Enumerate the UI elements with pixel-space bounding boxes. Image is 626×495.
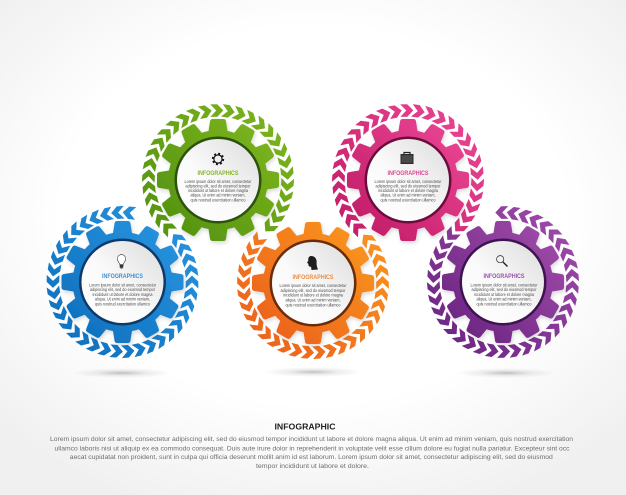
footer text block (50, 436, 573, 470)
purple body text: Lorem ipsum dolor sit amet, consectetur (470, 282, 538, 288)
orange body text: quis nostrud exercitation ullamco (286, 302, 341, 308)
footer text block: aecat cupidatat non proident, sunt in culpa qui officia deserunt mollit anim id est laborum. Lorem ipsum dolor sit amet, consectetur adipiscing elit, sed do eiusmod (70, 454, 553, 461)
pink body text: adipiscing elit, sed do eiusmod tempor (376, 184, 441, 189)
green dark ring (174, 136, 262, 224)
purple body text: aliqua. Ut enim ad minim veniam, (476, 296, 532, 302)
purple heading: INFOGRAPHICS (484, 273, 524, 280)
green body text: quis nostrud exercitation ullamco (190, 198, 246, 202)
pink body text: Lorem ipsum dolor sit amet, consectetur (374, 179, 442, 184)
panel: orange gear (237, 222, 389, 360)
title: INFOGRAPHIC (274, 422, 336, 432)
floor shadow: blue gear (72, 368, 172, 378)
icon: head silhouette (307, 256, 318, 270)
orange cog (251, 221, 375, 345)
pink body text: aliqua. Ut enim ad minim veniam, (380, 193, 436, 198)
purple body text: adipiscing elit, sed do eiusmod tempor (472, 287, 537, 292)
pink chevron ring (332, 104, 484, 238)
orange body text: Lorem ipsum dolor sit amet, consectetur (280, 283, 347, 288)
orange heading: INFOGRAPHICS (292, 274, 334, 281)
blue body text: incididunt ut labore et dolore magna (92, 292, 153, 297)
pink dark ring (364, 136, 452, 224)
orange white disc (272, 242, 354, 324)
blue body text: quis nostrud exercitation ullamco (95, 302, 151, 306)
icon: briefcase (400, 152, 414, 164)
panel: blue gear (44, 203, 202, 361)
footer text block: Lorem ipsum dolor sit amet, consectetur adipiscing elit, sed do eiusmod tempor incididunt ut labore et dolore magna aliqua. Ut enim ad minim veniam, quis nostrud exercitation (50, 436, 573, 443)
orange body text: aliqua. Ut enim ad minim veniam, (286, 298, 340, 302)
orange body text (280, 283, 347, 308)
pink cog (346, 118, 470, 242)
green body text: adipiscing elit, sed do eiusmod tempor (186, 184, 251, 189)
orange body text: incididunt ut labore et dolore magna (283, 292, 344, 298)
blue chevron ring (44, 203, 202, 361)
purple dark ring (460, 238, 546, 326)
blue body text: aliqua. Ut enim ad minim veniam, (95, 296, 150, 302)
orange body text: adipiscing elit, sed do eiusmod tempor (280, 288, 346, 293)
floor shadow: orange gear (263, 367, 363, 377)
green body text (184, 179, 252, 202)
green chevron ring (142, 104, 294, 238)
floor shadow: purple gear (456, 368, 556, 378)
purple chevron ring (424, 203, 582, 361)
blue body text: adipiscing elit, sed do eiusmod tempor (90, 287, 156, 292)
green heading: INFOGRAPHICS (198, 170, 238, 177)
green cog (156, 118, 280, 242)
green white disc (177, 139, 259, 221)
blue body text (89, 282, 156, 306)
purple body text: quis nostrud exercitation ullamco (476, 302, 532, 306)
pink body text: incididunt ut labore et dolore magna (378, 188, 439, 193)
panel: green gear (142, 104, 294, 245)
blue white disc (82, 241, 164, 323)
panel: pink gear (332, 104, 484, 245)
pink heading: INFOGRAPHICS (388, 170, 428, 177)
footer text block: ullamco laboris nisi ut aliquip ex ea commodo consequat. Duis aute irure dolor in reprehenderit in voluptate velit esse cillum dolore eu fugiat nulla pariatur. Excepteur sint occ (54, 445, 570, 452)
green body text: aliqua. Ut enim ad minim veniam, (190, 193, 246, 198)
pink white disc (367, 139, 449, 221)
orange dark ring (270, 240, 356, 326)
green body text: Lorem ipsum dolor sit amet, consectetur (184, 179, 252, 184)
purple white disc (462, 241, 544, 323)
purple body text: incididunt ut labore et dolore magna (474, 292, 535, 297)
footer text block: tempor incididunt ut labore et dolore. (256, 463, 369, 470)
blue body text: Lorem ipsum dolor sit amet, consectetur (89, 282, 156, 288)
icon: light bulb (117, 255, 126, 269)
blue dark ring (79, 238, 166, 326)
purple body text (470, 282, 538, 306)
icon: gear (213, 154, 223, 164)
orange chevron ring (237, 231, 389, 360)
blue cog (60, 220, 184, 344)
blue heading: INFOGRAPHICS (102, 273, 143, 280)
icon: magnifier (497, 256, 508, 266)
green body text: incididunt ut labore et dolore magna (188, 188, 249, 193)
pink body text: quis nostrud exercitation ullamco (380, 198, 436, 202)
pink body text (374, 179, 442, 202)
purple cog (441, 220, 565, 344)
panel: purple gear (424, 203, 582, 361)
